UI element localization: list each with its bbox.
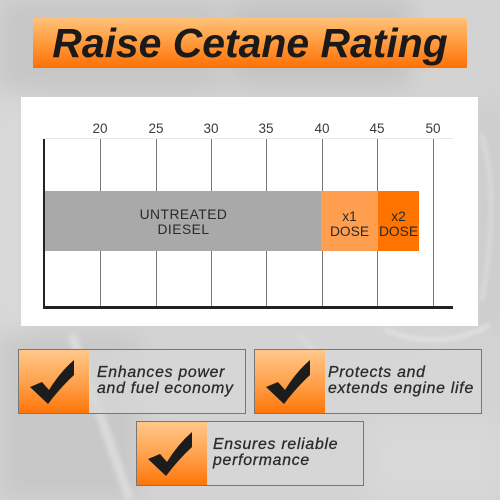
axis labels: 45: [369, 121, 385, 136]
text: and fuel economy: [97, 380, 234, 397]
panel: cetane chart: [21, 97, 478, 326]
axis labels: 20: [92, 121, 108, 136]
text: Enhances power: [97, 364, 225, 381]
bar: x2 dose: DOSE: [379, 224, 418, 239]
text: Protects and: [328, 364, 426, 381]
bar: x2 dose: [378, 191, 419, 251]
bar: x1 dose: x1: [342, 209, 357, 224]
icon: check mark: [137, 422, 207, 485]
text: performance: [213, 452, 310, 469]
axis labels: 30: [203, 121, 219, 136]
icon: check mark: [19, 350, 89, 413]
axis labels: 40: [314, 121, 330, 136]
card: protects engine: [254, 349, 482, 414]
icon: check mark: [255, 350, 325, 413]
chart: cetane rating scale: [43, 121, 453, 309]
axis labels: 35: [258, 121, 274, 136]
card: enhances power: [18, 349, 246, 414]
bar: untreated diesel: [45, 191, 321, 251]
bar: x2 dose: x2: [391, 209, 406, 224]
axis labels: 50: [425, 121, 441, 136]
bar: untreated diesel: UNTREATED: [140, 207, 227, 222]
card: reliable performance: [136, 421, 364, 486]
text: [328, 364, 474, 397]
bar: x1 dose: [321, 191, 378, 251]
text: [212, 436, 338, 469]
axis lines: [43, 139, 45, 309]
title banner: Raise Cetane Rating: [52, 20, 448, 66]
text: extends engine life: [328, 380, 474, 397]
bar: x1 dose: DOSE: [330, 224, 369, 239]
axis labels: 25: [148, 121, 164, 136]
text: Ensures reliable: [213, 436, 338, 453]
bar: untreated diesel: DIESEL: [157, 222, 210, 237]
text: [97, 364, 234, 397]
axis labels: [92, 121, 441, 136]
